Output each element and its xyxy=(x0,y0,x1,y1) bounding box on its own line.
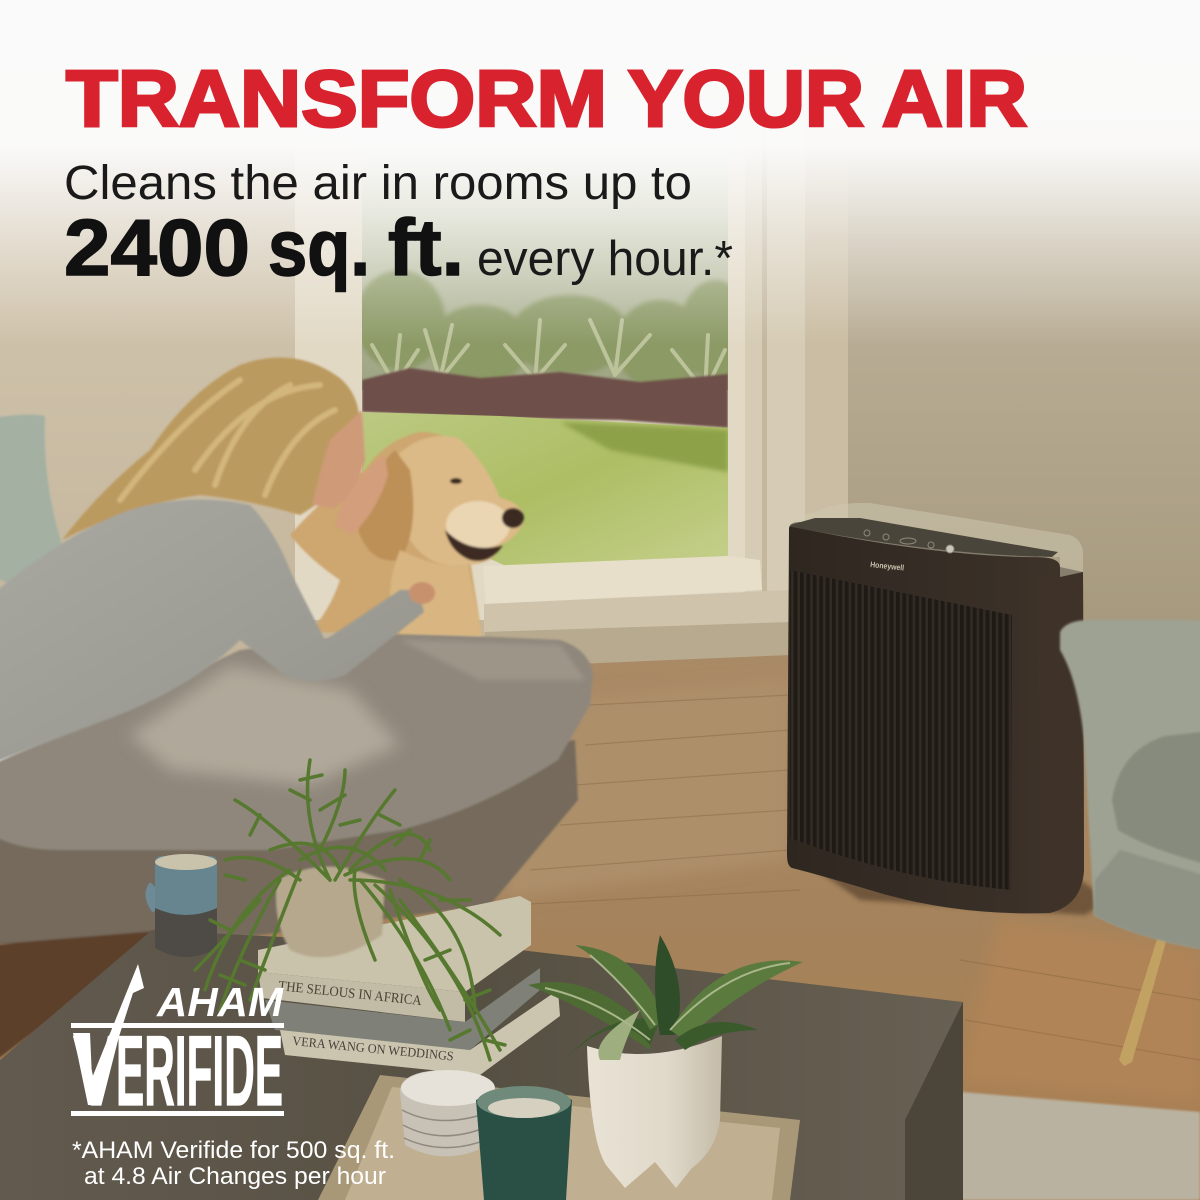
armchair leg xyxy=(1119,936,1167,1066)
stat: 2400 sq. ft.: ft. xyxy=(388,203,464,292)
middle book xyxy=(265,968,540,1050)
title: YOUR xyxy=(628,54,864,143)
logo bars xyxy=(71,1023,284,1116)
purifier control panel xyxy=(790,518,1058,557)
sweater xyxy=(0,500,424,768)
woman xyxy=(0,357,435,768)
window with garden view xyxy=(295,204,805,620)
sofa cushion xyxy=(0,632,593,850)
book title: selous: THE SELOUS IN AFRICA xyxy=(278,979,423,1009)
jeans xyxy=(0,655,16,762)
purifier body xyxy=(787,522,1084,913)
sofa base xyxy=(0,740,578,945)
hair highlights xyxy=(120,380,335,500)
beige plant pot xyxy=(276,867,385,957)
footnote xyxy=(72,1137,395,1190)
dog ear xyxy=(358,450,413,561)
headline stat and suffix xyxy=(64,203,733,292)
dog body xyxy=(290,432,482,636)
subtitle line: Cleans the air in rooms up to xyxy=(64,157,692,210)
title xyxy=(66,54,1027,143)
bottom book xyxy=(280,990,560,1075)
hand on dog xyxy=(335,455,388,535)
dog muzzle highlight xyxy=(446,501,510,549)
mug xyxy=(145,854,217,957)
coffee table xyxy=(0,930,963,1200)
purifier grille xyxy=(790,570,1012,890)
book title: vera wang: VERA WANG ON WEDDINGS xyxy=(292,1033,454,1064)
top book xyxy=(258,896,531,992)
face xyxy=(312,410,365,508)
hand on sofa xyxy=(409,582,435,604)
purifier shadow xyxy=(788,840,1110,915)
window sill and baseboard xyxy=(483,556,790,668)
pillow on sofa xyxy=(0,415,62,585)
logo AHAM wordmark: AHAM xyxy=(156,979,284,1025)
wooden floor xyxy=(0,620,1200,1200)
trailing green plant xyxy=(195,760,505,1060)
room background: walls xyxy=(0,0,1200,680)
stat: 2400 sq. ft.: sq. xyxy=(268,203,370,292)
hair xyxy=(62,357,360,540)
AHAM Verifide logo xyxy=(71,964,284,1126)
sofa xyxy=(0,632,593,945)
dog head xyxy=(385,436,524,566)
purifier side panel xyxy=(1037,572,1084,912)
marble coaster stack xyxy=(400,1070,495,1156)
broadleaf potted plant xyxy=(528,935,803,1060)
purifier glass lid xyxy=(789,503,1083,577)
dog chest xyxy=(390,550,482,636)
armchair xyxy=(1060,620,1200,1066)
footnote: at 4.8 Air Changes per hour xyxy=(84,1163,386,1190)
stack of books xyxy=(258,896,560,1075)
air purifier xyxy=(787,503,1110,915)
armchair cushion xyxy=(1112,730,1200,868)
suffix: every hour: every hour.* xyxy=(477,232,733,286)
sofa sunlit patch xyxy=(130,665,400,785)
logo VERIFIDE wordmark: V xyxy=(73,1015,119,1126)
logo VERIFIDE wordmark xyxy=(73,1015,283,1126)
white plant pot xyxy=(587,1036,722,1188)
rug xyxy=(900,1092,1200,1200)
green candle xyxy=(476,1086,572,1200)
dog nose and mouth xyxy=(502,508,524,528)
golden retriever xyxy=(290,432,524,636)
purifier buttons xyxy=(864,530,954,553)
stat: 2400 sq. ft. xyxy=(64,203,464,292)
top white fade overlay xyxy=(0,0,1200,345)
logo check mark xyxy=(73,964,144,1105)
title: TRANSFORM xyxy=(66,54,607,143)
stat: 2400 sq. ft.: 2400 xyxy=(64,203,250,292)
table leg xyxy=(905,1002,963,1200)
footnote: *AHAM Verifide for 500 sq. ft. xyxy=(72,1137,395,1164)
serving tray xyxy=(318,1075,800,1200)
text: ERIFIDE xyxy=(116,1015,283,1126)
table top xyxy=(0,930,963,1200)
title: AIR xyxy=(882,54,1027,143)
purifier brand label: Honeywell xyxy=(870,560,905,573)
armchair body xyxy=(1060,620,1200,952)
dark area under table xyxy=(0,930,170,1065)
